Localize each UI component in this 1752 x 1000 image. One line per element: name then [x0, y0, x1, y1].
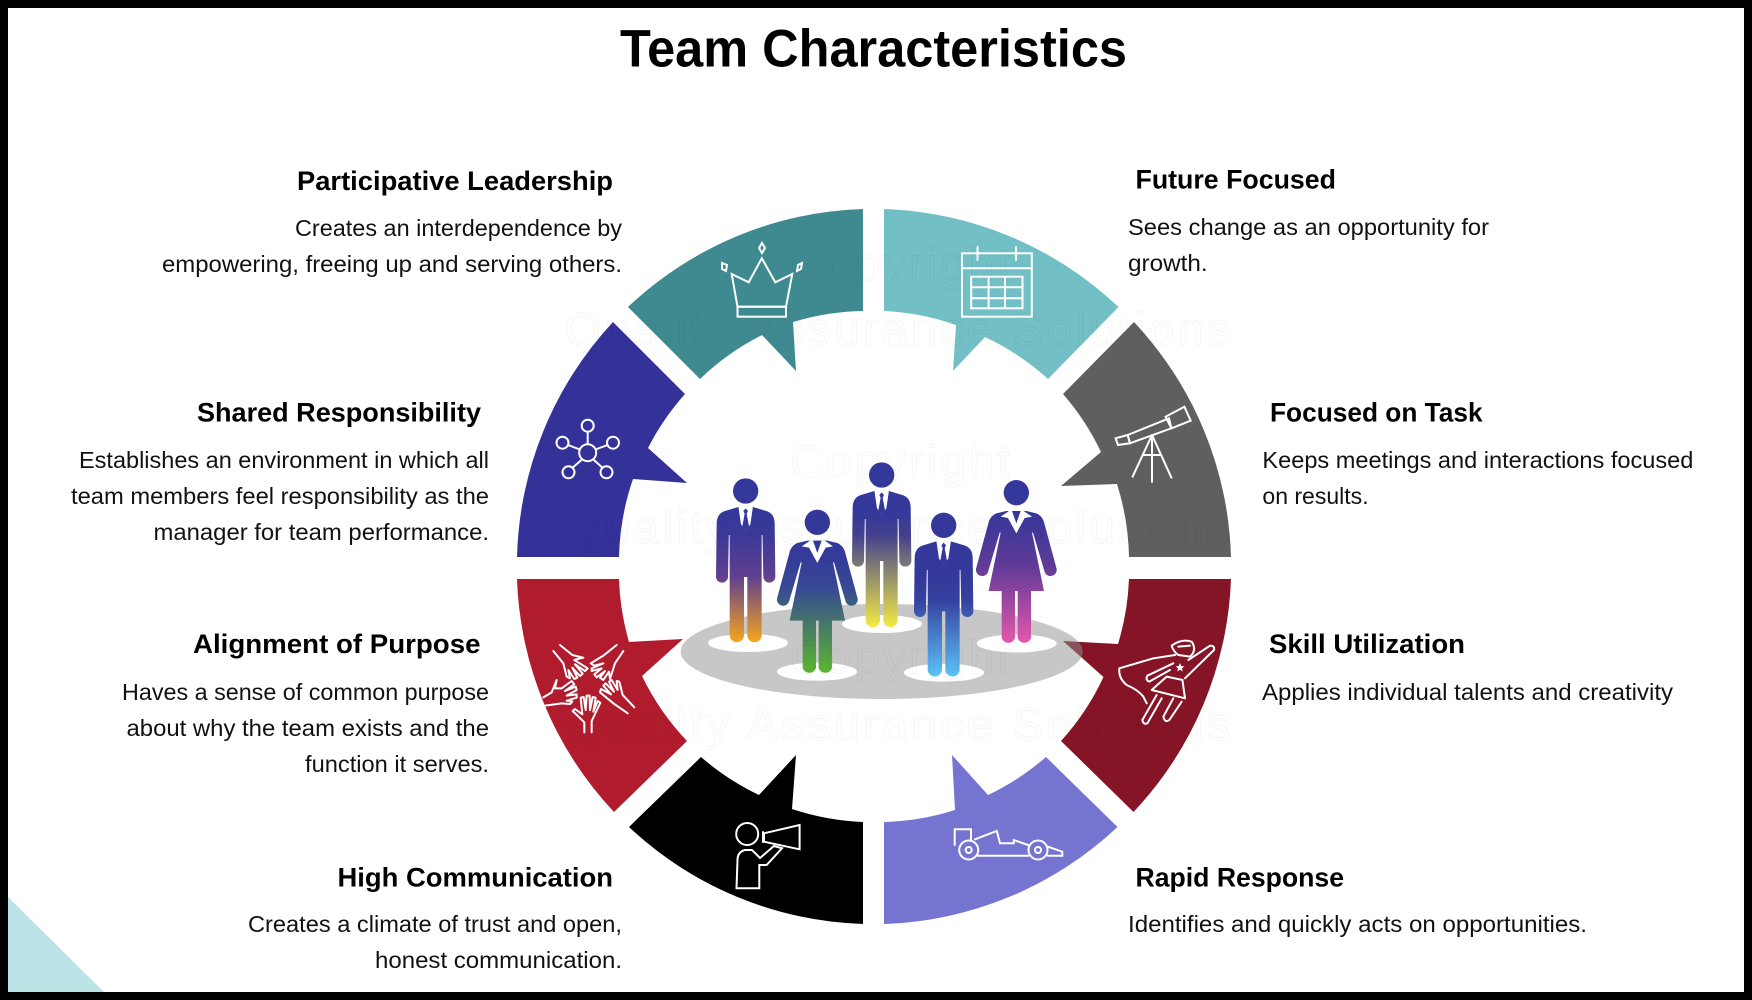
- text block: participative leadership: Participative Leadership: [297, 166, 613, 196]
- panel: future focused segment: [884, 209, 1118, 379]
- text block: focused on task: on results.: [1262, 483, 1369, 509]
- panel: alignment of purpose segment: [517, 579, 687, 812]
- text block: future focused: growth.: [1128, 250, 1208, 276]
- text block: alignment of purpose: Haves a sense of common purpose: [122, 679, 489, 705]
- text block: alignment of purpose: Alignment of Purpose: [193, 629, 480, 659]
- text block: shared responsibility: team members feel responsibility as the: [71, 483, 489, 509]
- text block: future focused: Sees change as an opportunity for: [1128, 214, 1489, 240]
- team figures: [716, 462, 1057, 676]
- panel: skill utilization segment: [1061, 579, 1231, 812]
- central platform: [681, 604, 1083, 699]
- text block: alignment of purpose: about why the team exists and the: [126, 715, 489, 741]
- icon: person with megaphone: [736, 823, 800, 888]
- text block: high communication: [248, 862, 622, 973]
- text block: shared responsibility: [71, 398, 489, 545]
- figure: man, blue: [914, 513, 973, 676]
- panel: participative leadership segment: [628, 209, 863, 379]
- text block: skill utilization: Skill Utilization: [1269, 629, 1465, 659]
- icon: network: [556, 420, 619, 478]
- text block: alignment of purpose: function it serves.: [305, 751, 489, 777]
- text block: rapid response: [1128, 862, 1587, 937]
- text block: high communication: honest communication.: [375, 947, 622, 973]
- text block: participative leadership: empowering, freeing up and serving others.: [162, 251, 622, 277]
- icon: joined hands: [543, 645, 634, 732]
- figure: man, yellow: [852, 462, 911, 627]
- icon: telescope: [1116, 407, 1191, 482]
- text block: alignment of purpose: [122, 629, 489, 777]
- text block: future focused: [1128, 164, 1489, 276]
- icon: superhero: [1119, 641, 1214, 724]
- watermark: Copyright: [790, 238, 1010, 290]
- panel: high communication segment: [629, 755, 863, 924]
- text block: rapid response: Identifies and quickly acts on opportunities.: [1128, 911, 1587, 937]
- text block: future focused: Future Focused: [1136, 164, 1336, 194]
- text block: shared responsibility: Shared Responsibility: [197, 398, 481, 428]
- watermark: Copyright: [790, 631, 1010, 683]
- watermark: Quality Assurance Solutions: [565, 698, 1230, 750]
- icon: crown: [722, 243, 802, 317]
- panel: rapid response segment: [884, 755, 1118, 924]
- figure: woman, pink: [976, 480, 1057, 643]
- text block: focused on task: [1262, 398, 1693, 509]
- watermark: Copyright: [790, 435, 1010, 487]
- watermark: [565, 238, 1230, 750]
- corner triangle: [8, 897, 104, 992]
- title: Team Characteristics: [620, 20, 1127, 78]
- icon: race car: [955, 829, 1062, 860]
- text block: focused on task: Focused on Task: [1270, 398, 1484, 428]
- text block: shared responsibility: manager for team performance.: [154, 519, 489, 545]
- text block: rapid response: Rapid Response: [1136, 862, 1344, 892]
- text block: high communication: Creates a climate of trust and open,: [248, 911, 622, 937]
- text block: skill utilization: Applies individual talents and creativity: [1262, 679, 1674, 705]
- text block: participative leadership: [162, 166, 623, 277]
- panel: focused on task segment: [1061, 322, 1231, 557]
- figure: woman, green: [777, 510, 858, 673]
- watermark: Quality Assurance Solutions: [565, 501, 1230, 553]
- text block: participative leadership: Creates an interdependence by: [295, 215, 623, 241]
- watermark: Quality Assurance Solutions: [565, 303, 1230, 355]
- icon: calendar: [962, 247, 1032, 317]
- figure: man, orange: [716, 478, 775, 642]
- text block: high communication: High Communication: [338, 862, 613, 892]
- text block: shared responsibility: Establishes an environment in which all: [79, 447, 489, 473]
- text block: focused on task: Keeps meetings and interactions focused: [1262, 447, 1693, 473]
- text block: skill utilization: [1262, 629, 1674, 705]
- panel: shared responsibility segment: [517, 322, 687, 557]
